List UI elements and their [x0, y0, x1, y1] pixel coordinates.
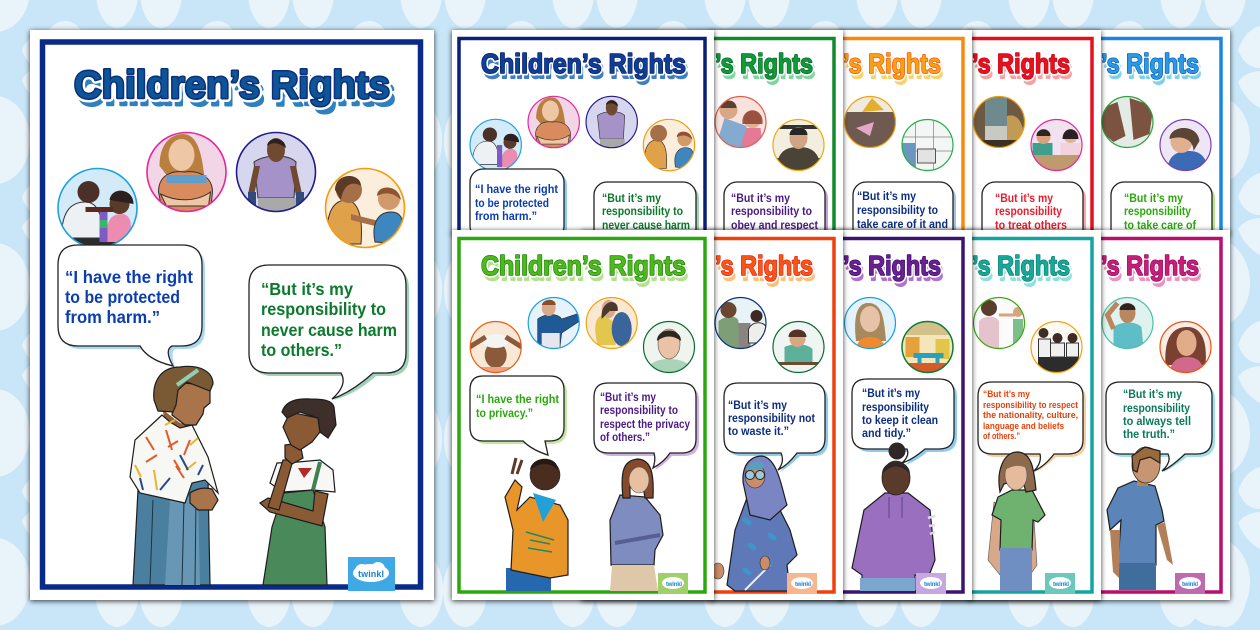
title: ’s Rights [972, 250, 1070, 281]
title: ’s Rights [843, 48, 941, 79]
speech bubble: responsibility: of others.” [600, 432, 650, 444]
title: Children’s Rights [483, 255, 688, 286]
icon: hands [1102, 96, 1154, 148]
icon: child in shower [470, 321, 522, 373]
speech bubble [1111, 182, 1215, 245]
icon: upset girl [1160, 321, 1212, 373]
title: ’s Rights [843, 48, 941, 79]
speech bubble: responsibility: “But it’s my [261, 279, 353, 299]
poster: green (bottom left) [452, 230, 714, 600]
title: ’s Rights [845, 255, 943, 286]
icon: group of students [1030, 321, 1082, 373]
speech bubble: responsibility to [731, 206, 812, 218]
poster: green [581, 30, 843, 245]
icon: boy blocking with arm [528, 297, 580, 349]
speech bubble: “But it’s my [728, 400, 788, 412]
speech bubble: right: from harm.” [475, 211, 537, 223]
icon: boy scratching head [1102, 297, 1154, 349]
speech bubble [978, 382, 1086, 472]
speech bubble: responsibility to [857, 205, 938, 217]
title: ’s Rights [843, 250, 941, 281]
speech bubble: responsibility [594, 182, 699, 245]
logo: twinkl: twinkl [1053, 582, 1069, 588]
icon: people at fence [973, 96, 1025, 148]
top row posters, stacked right to left [452, 30, 1230, 245]
speech bubble: the truth.” [1123, 429, 1175, 441]
figure: boy in orange jacket [505, 458, 568, 591]
icon: teen in wheelchair [586, 96, 638, 148]
title: ’s Rights [715, 48, 813, 79]
speech bubble: “But it’s my [1123, 389, 1183, 401]
speech bubble: language and beliefs [983, 421, 1064, 432]
title: ’s Rights [974, 255, 1072, 286]
title: ’s Rights [1103, 255, 1201, 286]
speech bubble: right to protection [58, 245, 205, 367]
speech bubble [853, 182, 956, 245]
speech bubble: responsibility: never cause harm [602, 220, 690, 232]
logo: twinkl: twinkl [924, 582, 940, 588]
speech bubble [1106, 382, 1215, 472]
logo: twinkl [1175, 573, 1205, 594]
speech bubble: to waste it.” [728, 426, 789, 438]
speech bubble: of others.” [983, 431, 1020, 442]
icon: angry boy [643, 321, 695, 373]
card [30, 30, 434, 600]
figure: girl in purple hoodie [852, 442, 935, 591]
title: Children’s Rights [481, 250, 686, 281]
title: ’s Rights [715, 250, 813, 281]
speech bubble: right to protection: to be protected [65, 287, 180, 307]
logo: twinkl: twinkl [666, 582, 682, 588]
speech bubble: responsibility [1123, 403, 1191, 415]
icon: girl with crossed arms [528, 96, 580, 148]
title: ’s Rights [1101, 250, 1199, 281]
speech bubble: responsibility: “But it’s my [602, 193, 662, 205]
speech bubble: right: to be protected [475, 198, 549, 210]
title: Children’s Rights [481, 250, 686, 281]
icon: girl portrait [844, 297, 896, 349]
bottom row posters, stacked right to left [452, 230, 1230, 600]
speech bubble: responsibility [594, 383, 699, 470]
title: Children’s Rights [74, 64, 390, 107]
speech bubble: responsibility: responsibility to [600, 405, 678, 417]
speech bubble [724, 182, 828, 245]
speech bubble [724, 383, 828, 472]
speech bubble: right to privacy [470, 376, 567, 457]
speech bubble: responsibility: responsibility to [602, 206, 683, 218]
figure: boy in blue t-shirt [1107, 447, 1173, 590]
poster: red-orange [581, 230, 843, 600]
speech bubble: responsibility [1124, 206, 1192, 218]
logo: twinkl: twinkl [358, 569, 384, 579]
speech bubble [982, 182, 1086, 245]
poster: navy (top left) [452, 30, 714, 245]
title: ’s Rights [1101, 250, 1199, 281]
speech bubble: right [470, 169, 567, 242]
logo: twinkl [787, 573, 817, 594]
border [42, 42, 420, 587]
title: ’s Rights [1101, 48, 1199, 79]
speech bubble: “But it’s my [862, 388, 921, 400]
poster: large blue Children's Rights poster [30, 30, 434, 600]
title: Children’s Rights [77, 71, 395, 114]
title: ’s Rights [715, 48, 813, 79]
title: ’s Rights [845, 53, 943, 84]
logo: twinkl [658, 573, 688, 594]
speech bubble: to take care of [1124, 220, 1196, 232]
logo: twinkl [916, 573, 946, 594]
figure: girl with crossed arms [610, 459, 663, 591]
speech bubble: right: “I have the right [475, 184, 558, 196]
speech bubble: right to protection: from harm.” [65, 307, 160, 327]
icon: woman helping boy [643, 119, 695, 171]
title: Children’s Rights [483, 53, 688, 84]
title: Children’s Rights [74, 64, 390, 107]
poster: red [839, 30, 1101, 245]
speech bubble: take care of it and [857, 219, 948, 231]
icon: two people at a table [714, 297, 766, 349]
title: ’s Rights [717, 53, 815, 84]
icon: bored child at table [772, 321, 824, 373]
speech bubble: right to privacy: to privacy.” [476, 408, 533, 420]
icon: worried man [772, 119, 824, 171]
title: ’s Rights [717, 255, 815, 286]
speech bubble: right to protection: “I have the right [65, 267, 193, 287]
title: ’s Rights [843, 250, 941, 281]
speech bubble: right to privacy: “I have the right [476, 394, 559, 406]
title: Children’s Rights [481, 48, 686, 79]
logo: twinkl [348, 557, 395, 591]
speech bubble: obey and respect [731, 220, 818, 232]
icon: messy sofa [844, 96, 896, 148]
speech bubble: responsibility [995, 206, 1063, 218]
speech bubble: responsibility: never cause harm [261, 320, 397, 340]
speech bubble: to treat others [995, 220, 1067, 232]
title: ’s Rights [972, 48, 1070, 79]
title: ’s Rights [972, 48, 1070, 79]
logo: twinkl [1045, 573, 1075, 594]
logo: twinkl: twinkl [795, 582, 811, 588]
figure: girl with patterned shirt and blue skirt [130, 366, 218, 585]
title: ’s Rights [974, 53, 1072, 84]
figure: girl in hijab with cane [712, 456, 797, 591]
speech bubble: the nationality, culture, [983, 410, 1078, 421]
poster: blue (top right) [968, 30, 1230, 245]
speech bubble [852, 379, 957, 465]
speech bubble: responsibility: to others.” [261, 340, 342, 360]
title: ’s Rights [1101, 48, 1199, 79]
poster: orange [710, 30, 972, 245]
icon: adult and child building blocks [470, 119, 522, 171]
speech bubble: and tidy.” [862, 428, 911, 440]
figure: girl in green overalls [260, 399, 336, 585]
speech bubble: responsibility not [728, 413, 815, 425]
speech bubble: to always tell [1123, 416, 1191, 428]
poster: purple [710, 230, 972, 600]
icon: teen in wheelchair [236, 132, 316, 212]
icon: two people [714, 96, 766, 148]
speech bubble: responsibility: “But it’s my [600, 392, 657, 404]
speech bubble: “But it’s my [995, 193, 1054, 205]
icon: girl looking down [1160, 119, 1212, 171]
speech bubble: “But it’s my [1124, 193, 1184, 205]
icon: adult and child building blocks [58, 168, 138, 248]
poster: teal [839, 230, 1101, 600]
icon: sad girl hugging knees [586, 297, 638, 349]
icon: woman helping boy [325, 168, 405, 248]
icon: bullying [973, 297, 1025, 349]
title: ’s Rights [1103, 53, 1201, 84]
speech bubble: “But it’s my [731, 193, 791, 205]
speech bubble: “But it’s my [983, 389, 1031, 400]
figure: girl in green t-shirt [988, 452, 1045, 591]
logo: twinkl: twinkl [1182, 582, 1198, 588]
speech bubble: responsibility to respect [983, 400, 1079, 411]
speech bubble: to keep it clean [862, 415, 938, 427]
speech bubble: responsibility [249, 265, 409, 400]
speech bubble: responsibility: responsibility to [261, 299, 386, 319]
icon: two children at a table [1030, 119, 1082, 171]
title: Children’s Rights [481, 48, 686, 79]
title: ’s Rights [972, 250, 1070, 281]
icon: girl with crossed arms [146, 132, 226, 212]
speech bubble: responsibility: respect the privacy [600, 419, 691, 431]
speech bubble: “But it’s my [857, 191, 917, 203]
poster: magenta (bottom right) [968, 230, 1230, 600]
speech bubble: responsibility [862, 402, 930, 414]
icon: colourful classroom [902, 321, 954, 373]
title: ’s Rights [715, 250, 813, 281]
icon: bathroom [902, 119, 954, 171]
